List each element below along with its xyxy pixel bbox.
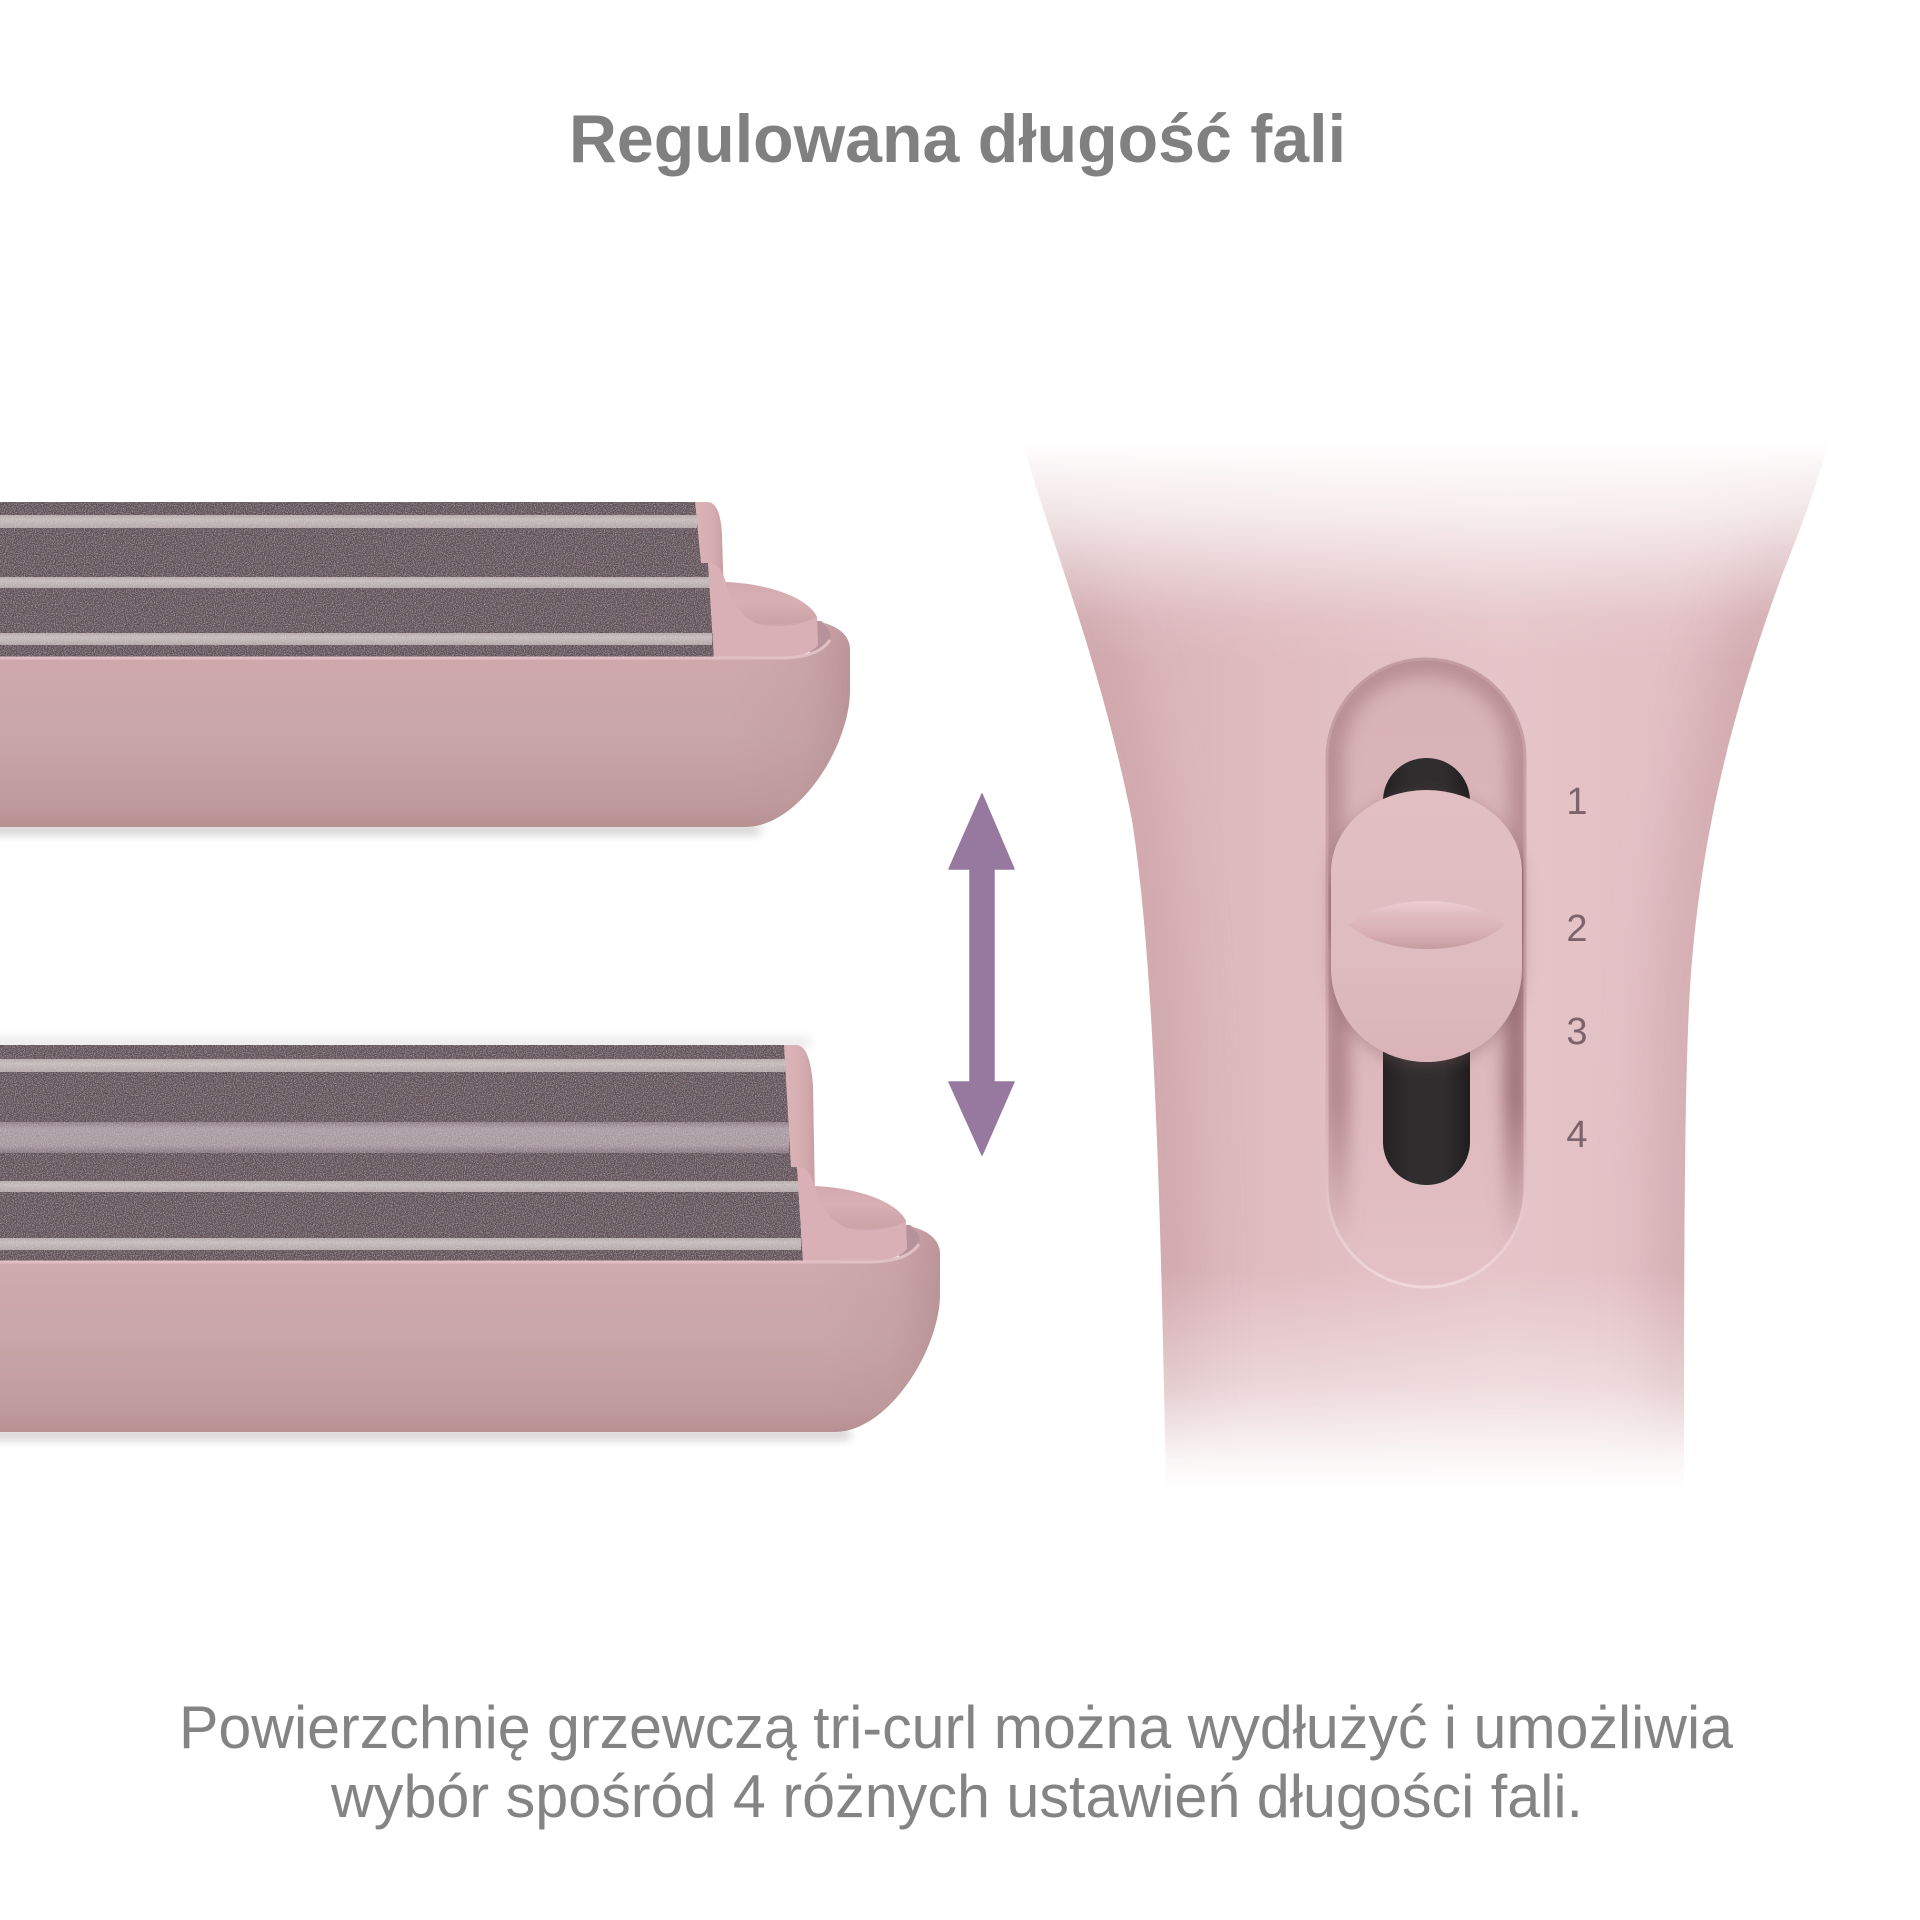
description text [179,1694,1734,1830]
base shell [0,622,850,827]
handle with length slider [1022,440,1830,1490]
shadow under bottom iron [0,1430,850,1439]
description text: Powierzchnię grzewczą tri-curl można wydłużyć i umożliwia [179,1694,1734,1761]
description text: wybór spośród 4 różnych ustawień długości fali. [330,1763,1583,1830]
upper rod end cap [693,502,724,600]
black slot [1383,758,1470,1185]
recess rim [1327,659,1525,1287]
knob at end of rod [710,582,818,658]
upper heating rod [0,502,701,563]
extended upper heating rod [0,1045,791,1167]
lower rod end cap [708,563,818,658]
top iron: short wave setting [0,502,850,834]
base shell [0,1226,940,1432]
scale numbers: 4 [1566,1114,1588,1156]
knob ridge [1349,901,1505,949]
upper rod end cap [782,1045,815,1200]
bottom iron: long wave setting [0,1038,940,1439]
base shell side shading [819,1226,940,1432]
pocket behind knob [899,1225,922,1264]
slider knob [1331,790,1522,1062]
knob top face [815,1186,906,1228]
base top highlight [0,640,830,658]
knob shadow [1331,794,1522,1066]
knob top face [726,582,817,624]
handle body [1022,440,1830,1490]
recess inner shading [1324,659,1528,1250]
scale numbers: 3 [1566,1011,1588,1053]
scale numbers: 1 [1566,781,1588,823]
scale numbers: 2 [1566,908,1588,950]
lower heating rod [0,1167,803,1261]
lower heating rod [0,563,714,657]
scale numbers [1566,781,1588,1156]
pocket behind knob [810,621,833,660]
bottom iron back shadow [0,1038,810,1048]
double arrow [949,794,1014,1155]
base top highlight [0,1244,919,1262]
title: Regulowana długość fali [569,101,1346,177]
knob at end of rod [799,1186,907,1262]
base shell side shading [730,622,850,827]
slider recess [1327,659,1525,1287]
lower rod end cap [797,1167,907,1262]
shadow under top iron [0,825,760,834]
